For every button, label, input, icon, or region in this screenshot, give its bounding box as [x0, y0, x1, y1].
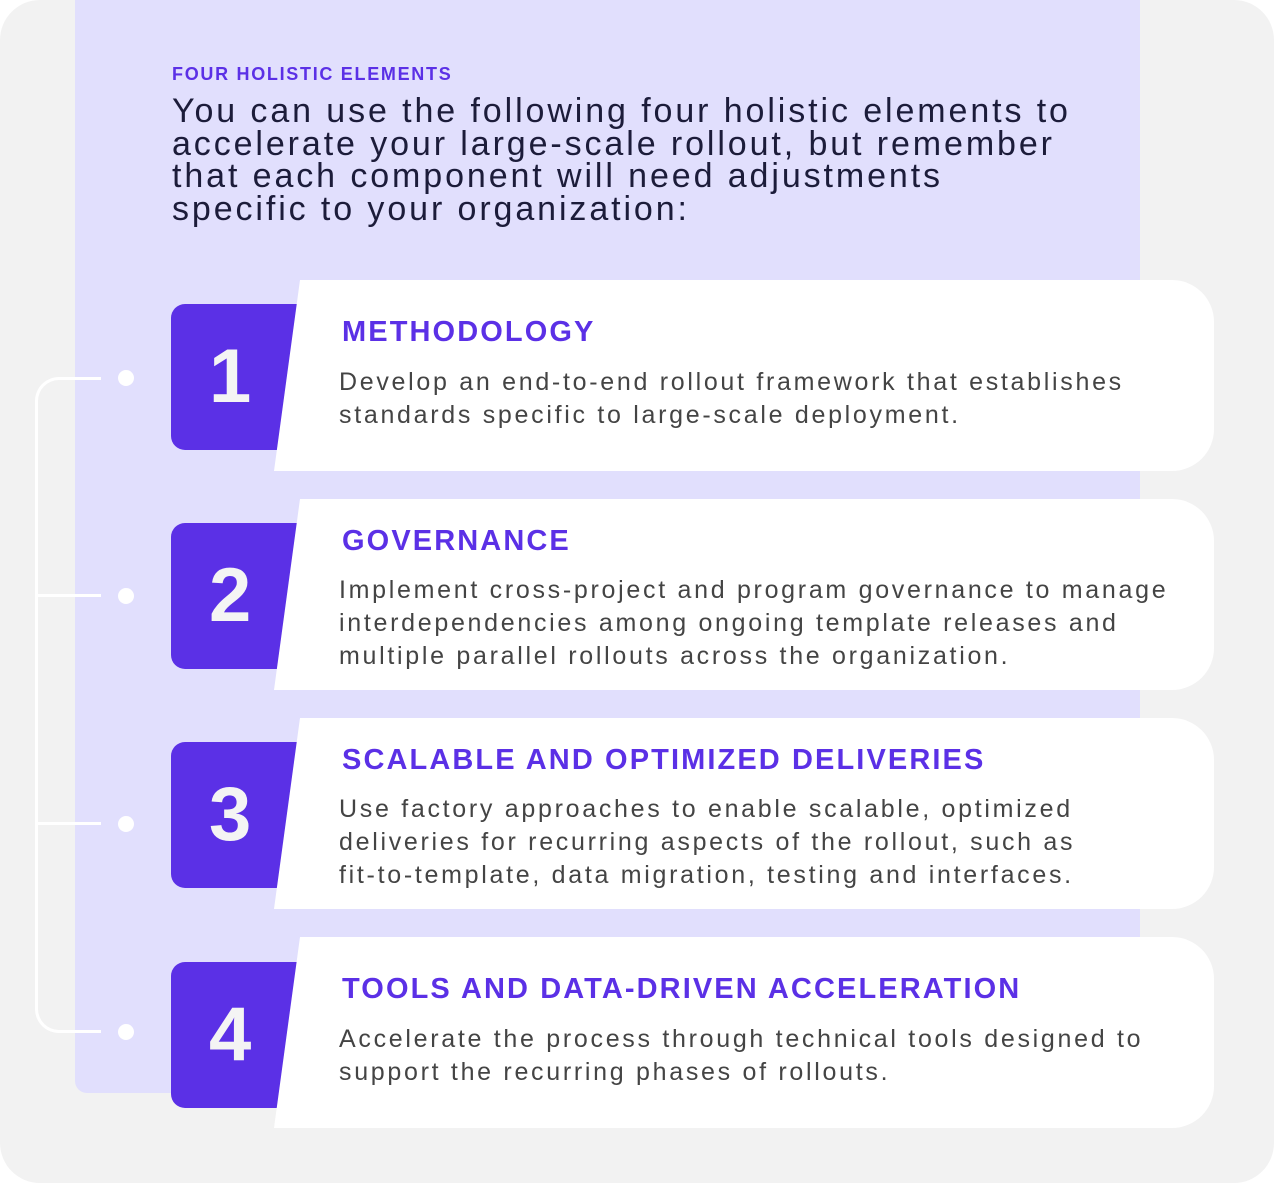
number 3: [171, 742, 311, 888]
card 2: Implement cross-project and program governance to manage: [339, 576, 1168, 604]
dot 3: [118, 816, 134, 832]
dot 1: [118, 370, 134, 386]
intro heading: that each component will need adjustments: [172, 157, 943, 195]
card 2: GOVERNANCE: [342, 525, 571, 557]
intro heading: You can use the following four holistic elements to: [172, 92, 1071, 130]
card 4: support the recurring phases of rollouts.: [339, 1058, 890, 1086]
card 4: Accelerate the process through technical tools designed to: [339, 1025, 1143, 1053]
card 4: [274, 937, 1214, 1128]
number 3: 3: [209, 772, 251, 857]
dot 2: [118, 588, 134, 604]
card 3: deliveries for recurring aspects of the rollout, such as: [339, 828, 1075, 856]
intro heading: accelerate your large-scale rollout, but remember: [172, 124, 1055, 162]
card 1: METHODOLOGY: [342, 316, 596, 348]
card 4: TOOLS AND DATA-DRIVEN ACCELERATION: [342, 973, 1021, 1005]
card 1: standards specific to large-scale deployment.: [339, 401, 961, 429]
number 1: [171, 304, 311, 450]
card 1: [274, 280, 1214, 471]
panel: lavender background: [75, 0, 1140, 1093]
card 3: [274, 718, 1214, 909]
card 3: fit-to-template, data migration, testing and interfaces.: [339, 861, 1074, 889]
number 4: 4: [209, 992, 251, 1077]
card 3: Use factory approaches to enable scalable, optimized: [339, 795, 1073, 823]
number 2: 2: [209, 553, 251, 638]
number 4: [171, 962, 311, 1108]
kicker: FOUR HOLISTIC ELEMENTS: [172, 64, 452, 84]
intro heading: specific to your organization:: [172, 190, 690, 228]
dot 4: [118, 1024, 134, 1040]
intro heading: [172, 92, 1071, 228]
number 2: [171, 523, 311, 669]
card 2: [274, 499, 1214, 690]
card 2: interdependencies among ongoing template releases and: [339, 609, 1119, 637]
card 2: multiple parallel rollouts across the organization.: [339, 642, 1010, 670]
number 1: 1: [209, 334, 251, 419]
card 3: SCALABLE AND OPTIMIZED DELIVERIES: [342, 744, 985, 776]
bracket connector: [35, 377, 101, 1033]
card 1: Develop an end-to-end rollout framework that establishes: [339, 368, 1124, 396]
